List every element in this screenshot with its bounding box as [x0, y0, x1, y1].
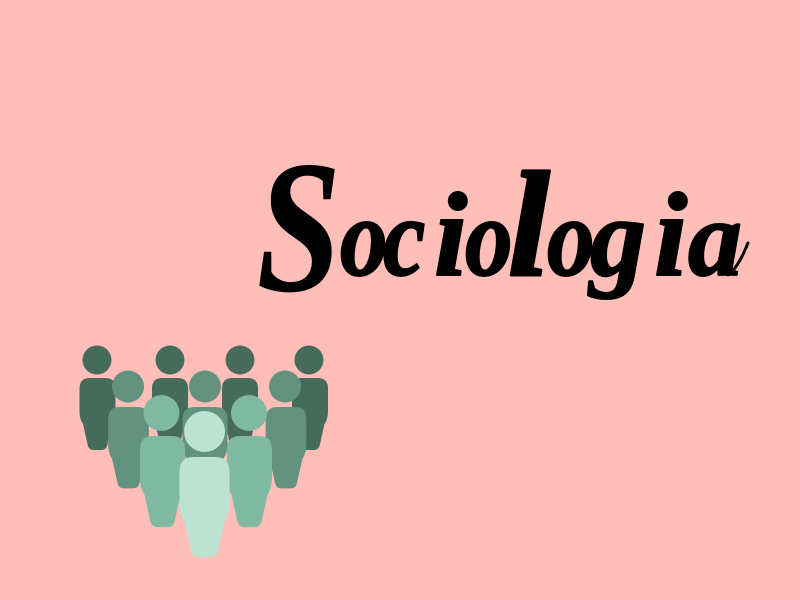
- title: Sociologia: i: [654, 168, 687, 301]
- title: Sociologia: l: [508, 142, 550, 308]
- title: Sociologia: o: [340, 176, 388, 300]
- back row people: [80, 346, 328, 450]
- title: Sociologia: o: [547, 176, 595, 300]
- title: Sociologia: g: [587, 176, 646, 300]
- title: Sociologia: i: [434, 168, 467, 301]
- decorative swash on final letter: [728, 243, 748, 275]
- front person: [179, 411, 230, 557]
- title: Sociologia: a: [688, 180, 742, 299]
- title: Sociologia: c: [383, 176, 425, 300]
- second row people: [108, 370, 306, 488]
- title: Sociologia: S: [257, 122, 341, 331]
- third row people: [140, 395, 272, 527]
- title: Sociologia: o: [465, 176, 513, 300]
- icon: group of people: [80, 346, 328, 557]
- title: Sociologia: [257, 122, 742, 331]
